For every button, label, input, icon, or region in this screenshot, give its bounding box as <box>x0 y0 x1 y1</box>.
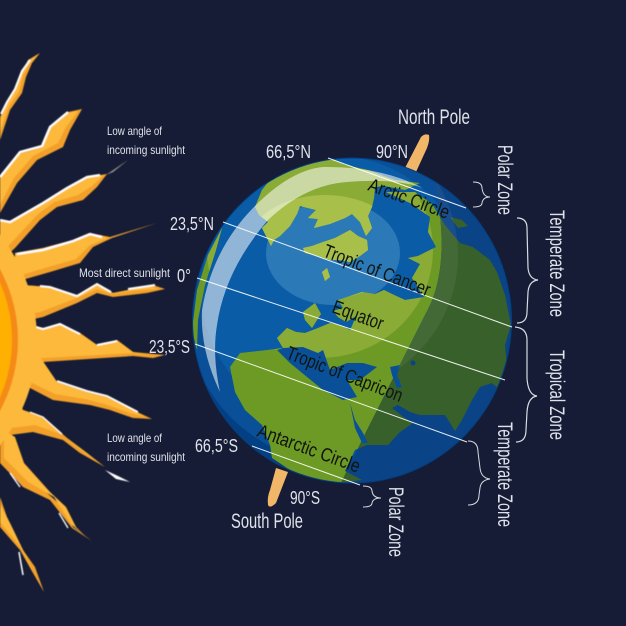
latitude labels: 66,5°N <box>266 142 311 162</box>
lit ocean core <box>266 201 400 305</box>
seas <box>277 347 416 443</box>
sun ray 6 <box>10 322 165 362</box>
ocean <box>193 159 439 464</box>
globe limb <box>192 158 512 484</box>
axis: south rod <box>268 468 288 507</box>
sun orange rim <box>0 192 18 488</box>
night halo <box>398 183 458 368</box>
circle labels on globe: Antarctic Circle <box>254 421 363 478</box>
latitude labels: 23,5°N <box>170 214 214 234</box>
circle labels on globe <box>254 175 452 478</box>
title labels: South Pole <box>231 510 303 533</box>
circle labels on globe: Tropic of Cancer <box>320 241 434 301</box>
sun inner disc <box>0 198 12 482</box>
sun <box>0 53 165 592</box>
sun core body <box>0 173 37 507</box>
axis: north rod <box>405 134 429 172</box>
circle labels on globe: Equator <box>329 297 387 335</box>
sunlight labels: Low angle of <box>107 431 163 445</box>
latitude labels: 90°S <box>290 488 320 508</box>
land: night side <box>341 217 511 482</box>
sunlight labels <box>79 124 186 464</box>
latitude labels: 90°N <box>376 142 408 162</box>
circle labels on globe: Arctic Circle <box>365 175 452 224</box>
latitude labels: 66,5°S <box>195 436 238 456</box>
sunlight labels: incoming sunlight <box>107 143 186 157</box>
latitude lines <box>195 158 512 485</box>
zone labels: Tropical Zone <box>545 350 568 440</box>
night ocean <box>350 183 497 464</box>
sun ray 3 thin tip <box>106 160 128 175</box>
zone labels: Temperate Zone <box>493 422 516 527</box>
sunlight labels: incoming sunlight <box>107 450 186 464</box>
sun ray 9 <box>0 427 92 541</box>
infographic canvas <box>0 52 566 592</box>
zone labels: Polar Zone <box>493 145 516 215</box>
zone labels: Polar Zone <box>384 487 407 557</box>
zone labels: Temperate Zone <box>545 210 568 317</box>
sun ray 8 thin tip <box>105 470 130 482</box>
lit ocean <box>202 158 440 374</box>
sun ray 7 <box>10 350 152 419</box>
braces <box>363 182 538 507</box>
sun ray 4 <box>15 223 157 282</box>
sun ray 8 <box>0 385 105 467</box>
sun ray 1 <box>0 53 40 140</box>
latitude labels: 0° <box>177 266 191 286</box>
circle labels on globe: Tropic of Capricon <box>283 343 406 407</box>
highlight crescent <box>202 167 423 392</box>
sun ray 3 <box>0 174 107 262</box>
land: day side <box>193 160 442 482</box>
title labels <box>231 106 470 533</box>
sun ray 10 <box>0 497 44 592</box>
sunlight labels: Low angle of <box>107 124 163 138</box>
title labels: North Pole <box>398 106 470 129</box>
land: lit band <box>207 160 433 358</box>
zone labels <box>384 145 568 557</box>
latitude labels <box>149 142 408 508</box>
sun ray 2 <box>0 109 82 213</box>
sunlight labels: Most direct sunlight <box>79 266 171 280</box>
globe <box>192 158 512 484</box>
land: brightest <box>262 195 372 296</box>
latitude labels: 23,5°S <box>149 337 190 357</box>
sun ray 5 <box>10 284 165 322</box>
